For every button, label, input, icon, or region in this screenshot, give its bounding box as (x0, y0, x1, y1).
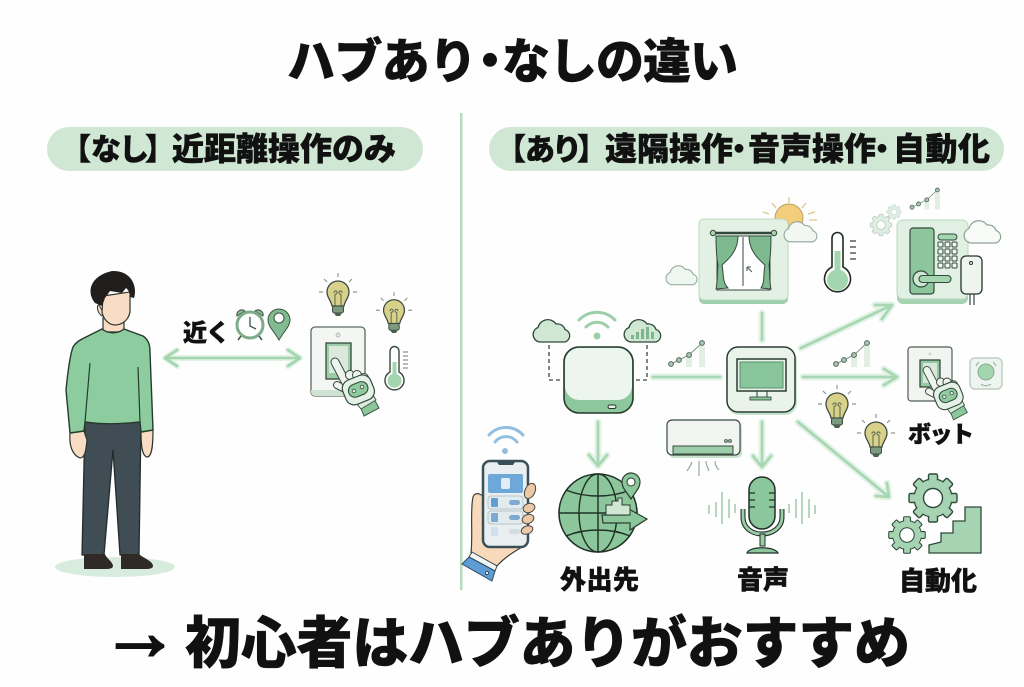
label: near: 近く (183, 320, 230, 347)
panel heading: with hub (489, 127, 1004, 171)
icon: bulb 3 (818, 385, 856, 428)
icon: gears and stairs (889, 474, 981, 553)
panel heading: without hub: 近距離操作のみ (172, 131, 396, 167)
label: automation: 自動化 (899, 566, 977, 596)
panel: with hub (462, 188, 1002, 596)
panel heading: with hub: 音声操作 (748, 131, 876, 167)
icon: air conditioner (667, 420, 742, 476)
icon: microphone (709, 477, 815, 553)
title: ハブあり (287, 35, 477, 89)
icon: switch bot (908, 347, 967, 420)
icon: bulb 2 (376, 292, 412, 333)
label: voice: 音声 (737, 565, 789, 595)
label: away: 外出先 (560, 565, 639, 595)
graph: tv to bot (834, 341, 870, 367)
icon: wall switch with robot (311, 327, 379, 416)
title: ・ (466, 36, 514, 89)
panel heading: without hub: 【なし】 (61, 134, 175, 167)
conclusion: → (101, 588, 179, 676)
icon: location pin (268, 309, 290, 340)
icon: alarm clock (237, 310, 263, 340)
label: bot: ボット (908, 421, 974, 447)
panel heading: without hub (47, 127, 423, 171)
icon: thermometer (385, 346, 408, 390)
graph: hub to tv (669, 341, 705, 367)
panel heading: with hub: ・ (724, 134, 754, 167)
panel heading: with hub: 【あり】 (496, 134, 607, 167)
panel: without hub (55, 271, 412, 577)
double arrow (165, 350, 300, 366)
panel heading: with hub: 自動化 (893, 131, 990, 167)
icon: globe with pin and city (559, 473, 647, 552)
icon: sun and clouds by curtain (666, 197, 817, 285)
icon: gears and chart above lock (870, 188, 940, 236)
panel heading: with hub: ・ (867, 134, 897, 167)
icon: hub device (564, 347, 633, 413)
title: なしの違い (502, 36, 738, 89)
icon: bulb 1 (319, 273, 357, 316)
icon: thermometer large (825, 232, 856, 292)
icon: tv panel (727, 347, 797, 415)
center divider (460, 113, 462, 590)
conclusion (101, 588, 910, 676)
icon: smart lock panel (897, 220, 1001, 305)
arrows: hub connections (589, 305, 897, 497)
conclusion: 初心者はハブありがおすすめ (185, 612, 910, 675)
icon: hub clouds and wifi (533, 312, 661, 380)
icon: phone in hand (462, 427, 538, 581)
icon: sensor (970, 358, 1002, 389)
icon: bulb 4 (857, 414, 895, 457)
person illustration (55, 271, 175, 577)
icon: curtain panel (699, 219, 817, 304)
panel heading: with hub: 遠隔操作 (605, 131, 733, 167)
